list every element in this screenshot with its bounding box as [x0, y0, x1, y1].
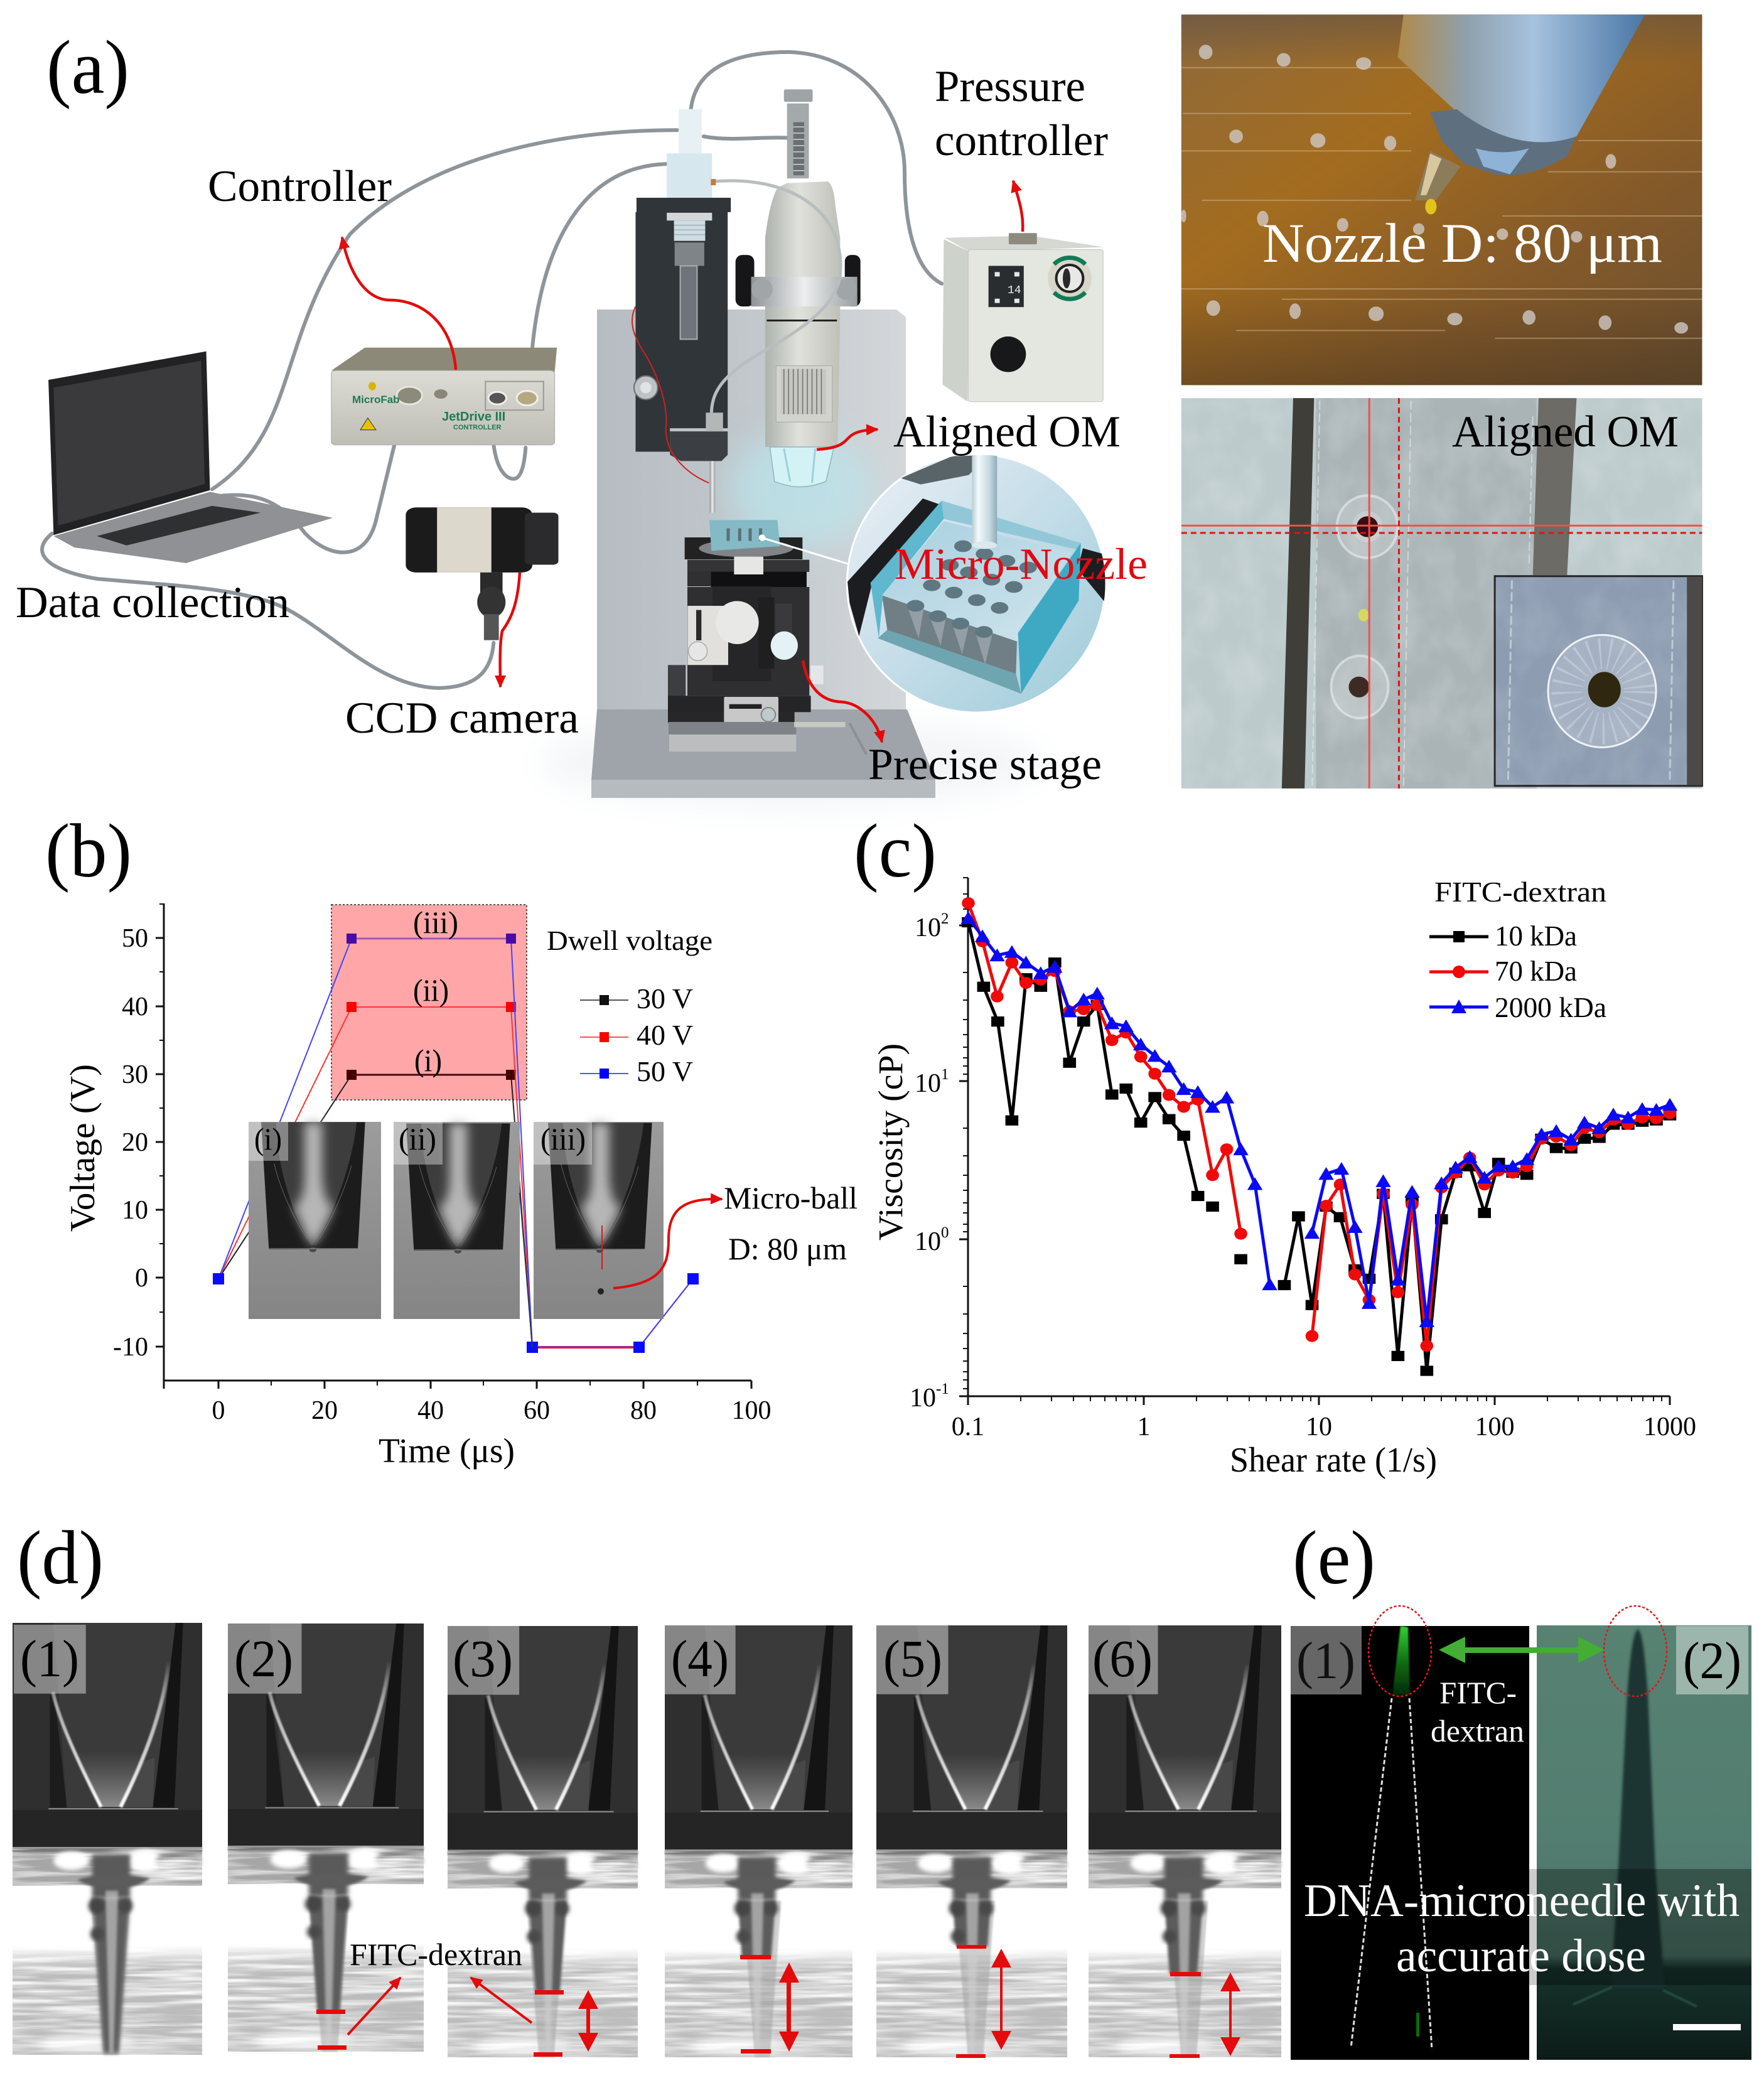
green double arrow — [1439, 1637, 1605, 1663]
micro-nozzle magnified inset — [847, 455, 1105, 713]
y tick labels: 40 — [122, 993, 148, 1021]
pink labels — [413, 905, 458, 1078]
small controller text: CONTROLLER — [453, 424, 501, 431]
y tick labels: 10 — [915, 1069, 941, 1098]
heading (b): (b) — [45, 809, 132, 893]
label: Pressure controller — [935, 62, 1108, 165]
arrow: FITC-dextran callout left — [348, 1978, 401, 2035]
y axis title: Voltage (V) — [63, 1064, 102, 1232]
small controller text — [352, 394, 505, 431]
arrow: panel 5 height — [991, 1949, 1011, 2050]
label: Precise stage: Precise stage — [868, 740, 1102, 789]
icon: precise stage — [668, 520, 866, 755]
y tick labels: 10 — [915, 913, 941, 942]
x tick labels: 40 — [417, 1396, 444, 1425]
image labels: (2) — [1683, 1632, 1741, 1690]
heading (d): (d) — [17, 1516, 104, 1600]
y tick labels: 20 — [122, 1128, 148, 1157]
y tick labels: 0 — [941, 1224, 949, 1241]
panel b: voltage waveform chart — [45, 809, 858, 1470]
micro-ball callout — [724, 1180, 858, 1266]
arrow: panel 6 height — [1220, 1973, 1240, 2056]
axes — [959, 878, 1670, 1405]
label: FITC-dextran: FITC-dextran — [350, 1937, 522, 1972]
icon: laptop — [48, 352, 333, 563]
arrow: panel 3 height — [578, 1990, 598, 2052]
label: FITC-dextran: dextran — [1431, 1713, 1524, 1748]
icon: controller box — [331, 348, 557, 445]
label: Aligned OM: Aligned OM — [1452, 407, 1679, 456]
image (1) — [13, 1623, 202, 2055]
soft background shadow — [540, 719, 1042, 807]
image labels — [254, 1121, 586, 1156]
pink labels: (iii) — [413, 905, 458, 940]
image (5) — [876, 1625, 1067, 2057]
image (2) — [228, 1623, 424, 2052]
image labels: (iii) — [540, 1121, 586, 1156]
overlay band — [1529, 1869, 1751, 1985]
y tick labels: 10 — [915, 1227, 941, 1256]
pink labels: (i) — [414, 1043, 442, 1078]
y tick labels: -10 — [113, 1333, 148, 1362]
legend: FITC-dextran — [1434, 876, 1606, 908]
icon: optical microscope — [736, 89, 861, 487]
series: 50 V — [213, 934, 699, 1353]
apparatus back plate and base — [591, 310, 935, 798]
label: CCD camera: CCD camera — [345, 694, 579, 743]
image labels: (2) — [234, 1630, 293, 1688]
image (6) — [1089, 1625, 1281, 2057]
pink labels: (ii) — [413, 972, 449, 1008]
x tick labels: 60 — [524, 1396, 550, 1425]
icon: CCD camera — [406, 507, 559, 640]
legend: 30 V — [637, 983, 693, 1015]
label: Controller: Controller — [208, 162, 392, 211]
label: FITC-dextran — [1431, 1675, 1524, 1748]
icon: dispensing head — [632, 109, 731, 513]
micro-ball callout: Micro-ball — [724, 1180, 858, 1215]
icon: clear air tube — [711, 179, 841, 412]
red height markers — [316, 1945, 1201, 2058]
data series — [968, 903, 1670, 1371]
x tick labels: 0 — [212, 1396, 225, 1425]
image labels: (i) — [254, 1121, 282, 1156]
series: 10 kDa — [968, 922, 1670, 1371]
image (4) — [665, 1625, 852, 2057]
legend: 50 V — [637, 1055, 693, 1087]
y tick labels: 0 — [135, 1264, 148, 1293]
brightfield image (2) — [1537, 1625, 1751, 2060]
label: Pressure controller: controller — [935, 116, 1108, 165]
image labels: (5) — [883, 1630, 942, 1688]
label: FITC-dextran: FITC- — [1439, 1675, 1517, 1710]
y tick labels — [910, 910, 949, 1413]
laptop, controller, camera and cables — [42, 52, 942, 688]
y tick labels: 30 — [122, 1060, 148, 1089]
y tick labels — [113, 924, 148, 1362]
legend: 10 kDa — [1495, 920, 1577, 952]
dispensing head and microscope — [632, 89, 861, 512]
legend: 40 V — [637, 1019, 693, 1051]
caption: DNA-microneedle with accurate dose — [1304, 1875, 1740, 1982]
image labels: (ii) — [399, 1121, 436, 1156]
panel e: DNA microneedle images — [1291, 1516, 1751, 2060]
red annotation arrows — [342, 181, 1023, 742]
caption: DNA-microneedle with accurate dose: DNA-microneedle with — [1304, 1875, 1740, 1927]
icon: pressure controller box — [942, 233, 1104, 402]
panel d: filling sequence — [13, 1516, 1281, 2058]
series: 70 kDa — [968, 903, 1670, 1346]
legend: 70 kDa — [1495, 955, 1577, 987]
x tick labels — [212, 1396, 771, 1425]
legend — [1429, 876, 1606, 1023]
label: Micro-Nozzle: Micro-Nozzle — [895, 540, 1148, 589]
image (iii) — [534, 1122, 664, 1319]
x axis title: Time (μs) — [379, 1431, 515, 1470]
x tick labels: 100 — [1475, 1413, 1514, 1441]
series: 2000 kDa — [968, 918, 1670, 1321]
droplet images — [249, 1121, 664, 1319]
image labels: (3) — [453, 1630, 513, 1688]
arrow: panel 4 height — [779, 1963, 799, 2052]
label: Pressure controller: Pressure — [935, 62, 1085, 111]
panel a: printing setup illustration — [16, 25, 1148, 807]
label: Data collection: Data collection — [16, 578, 289, 627]
image (3) — [448, 1626, 638, 2057]
y tick labels: -1 — [936, 1381, 949, 1397]
image labels: (1) — [1296, 1632, 1355, 1690]
x tick labels: 1000 — [1643, 1413, 1696, 1441]
post-dwell waveform segment — [520, 1193, 532, 1347]
image (i) — [249, 1122, 381, 1319]
zoomed crater inset — [1495, 576, 1702, 786]
y tick labels: 50 — [122, 924, 148, 953]
image labels: (4) — [671, 1630, 729, 1688]
y tick labels: 2 — [941, 910, 949, 927]
small controller text: JetDrive III — [442, 410, 505, 424]
y tick labels: 10 — [122, 1196, 148, 1225]
x tick labels: 100 — [732, 1396, 771, 1425]
x tick labels: 80 — [630, 1396, 657, 1425]
dashed circle left — [1369, 1606, 1431, 1696]
image (ii) — [394, 1122, 520, 1319]
x tick labels: 1 — [1137, 1413, 1150, 1441]
heading (e): (e) — [1293, 1516, 1375, 1600]
dashed circle right — [1604, 1606, 1667, 1696]
micro-ball callout: D: 80 μm — [728, 1231, 847, 1266]
cables — [42, 52, 942, 688]
image labels: (6) — [1092, 1630, 1153, 1688]
image labels: (1) — [20, 1630, 79, 1688]
y tick labels: 1 — [941, 1066, 949, 1083]
series: 40 V — [218, 1002, 693, 1347]
fluorescence image (1) — [1291, 1626, 1529, 2060]
legend — [580, 983, 693, 1087]
caption: DNA-microneedle with accurate dose: accurate dose — [1396, 1930, 1646, 1982]
legend: 2000 kDa — [1495, 991, 1606, 1023]
small controller text: MicroFab — [352, 394, 400, 406]
image labels — [1296, 1632, 1741, 1690]
x axis title: Shear rate (1/s) — [1230, 1441, 1437, 1480]
axes — [156, 903, 751, 1389]
arrow: FITC-dextran callout right — [471, 1978, 532, 2023]
pink highlight — [331, 905, 527, 1100]
y axis title: Viscosity (cP) — [871, 1043, 910, 1241]
series: 30 V — [218, 1070, 693, 1347]
legend title: Dwell voltage — [547, 925, 713, 956]
photo: nozzle over microneedle array — [1181, 14, 1702, 385]
heading (a): (a) — [46, 25, 129, 110]
label: Nozzle D: 80 μm: Nozzle D: 80 μm — [1262, 213, 1662, 274]
image labels — [20, 1630, 1153, 1688]
photo: aligned optical microscope view — [1181, 398, 1702, 789]
y tick labels: 10 — [910, 1384, 936, 1413]
x tick labels — [952, 1413, 1696, 1441]
x tick labels: 10 — [1306, 1413, 1332, 1441]
panel c: viscosity chart — [854, 809, 1696, 1480]
x tick labels: 0.1 — [952, 1413, 984, 1441]
arrow to micro-ball — [613, 1199, 722, 1288]
display digits: 14 — [1008, 284, 1021, 297]
x tick labels: 20 — [311, 1396, 338, 1425]
label: Aligned OM: Aligned OM — [893, 407, 1121, 456]
heading (c): (c) — [854, 809, 937, 893]
